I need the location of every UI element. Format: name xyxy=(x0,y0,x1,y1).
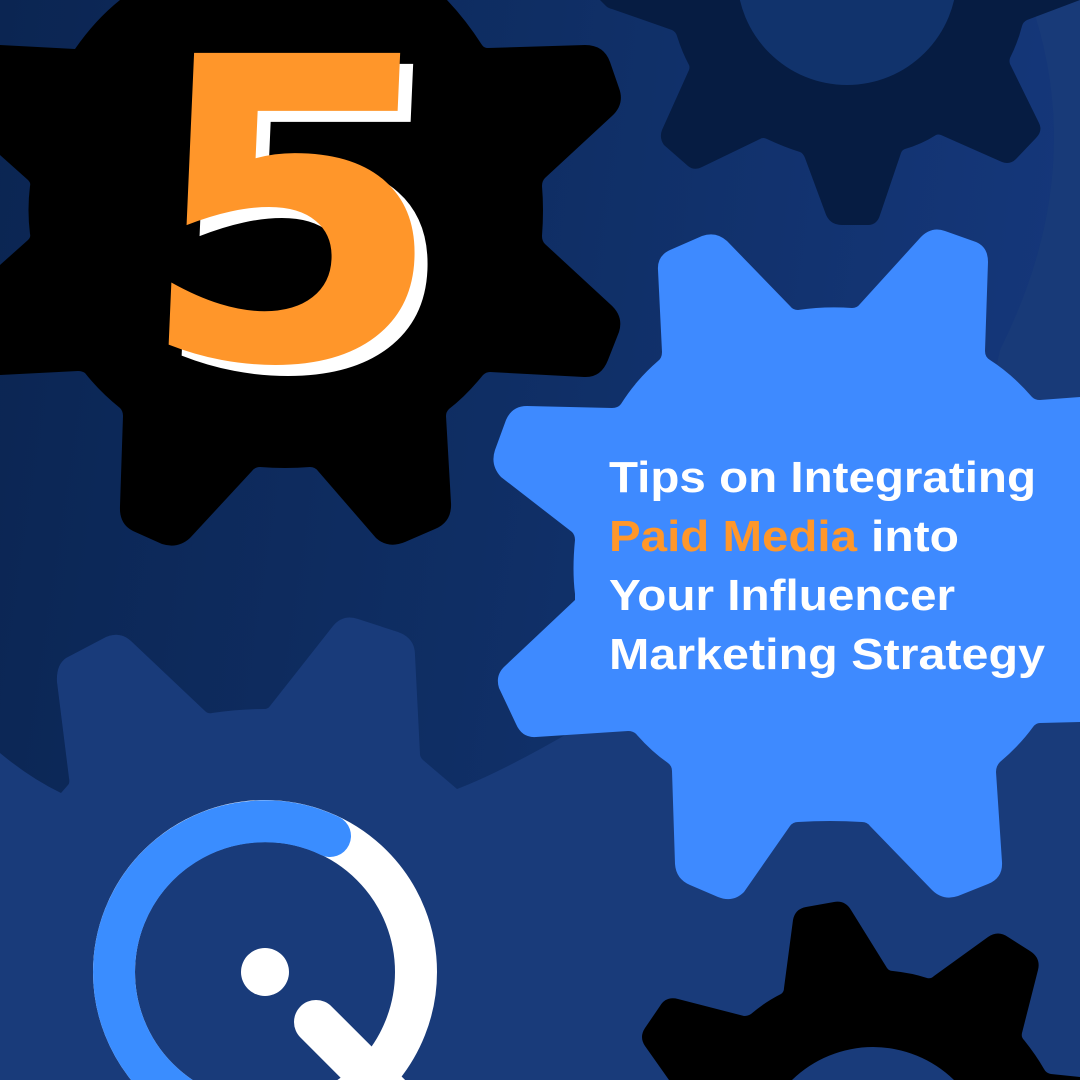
background gear: top dark xyxy=(600,0,1080,225)
gear: black bottom right xyxy=(642,902,1080,1080)
gear: black top left behind number xyxy=(0,0,621,546)
background gear: bottom left navy xyxy=(0,618,1080,1080)
gear: bright blue title gear xyxy=(493,230,1080,899)
big number 5 xyxy=(130,0,471,469)
title line 2 xyxy=(609,512,959,561)
title line 4: Marketing Strategy xyxy=(609,630,1046,679)
logo centre dot xyxy=(241,948,289,996)
title line 3: Your Influencer xyxy=(609,571,955,620)
title line 2: Paid Media xyxy=(609,512,858,561)
title line 1: Tips on Integrating xyxy=(609,453,1036,502)
title line 2: into xyxy=(871,512,959,561)
logo tail xyxy=(316,1022,392,1080)
logo: Q ring mark xyxy=(114,821,416,1080)
logo ring blue arc xyxy=(114,821,330,1080)
logo ring white part xyxy=(114,821,416,1080)
title text xyxy=(609,453,1046,679)
